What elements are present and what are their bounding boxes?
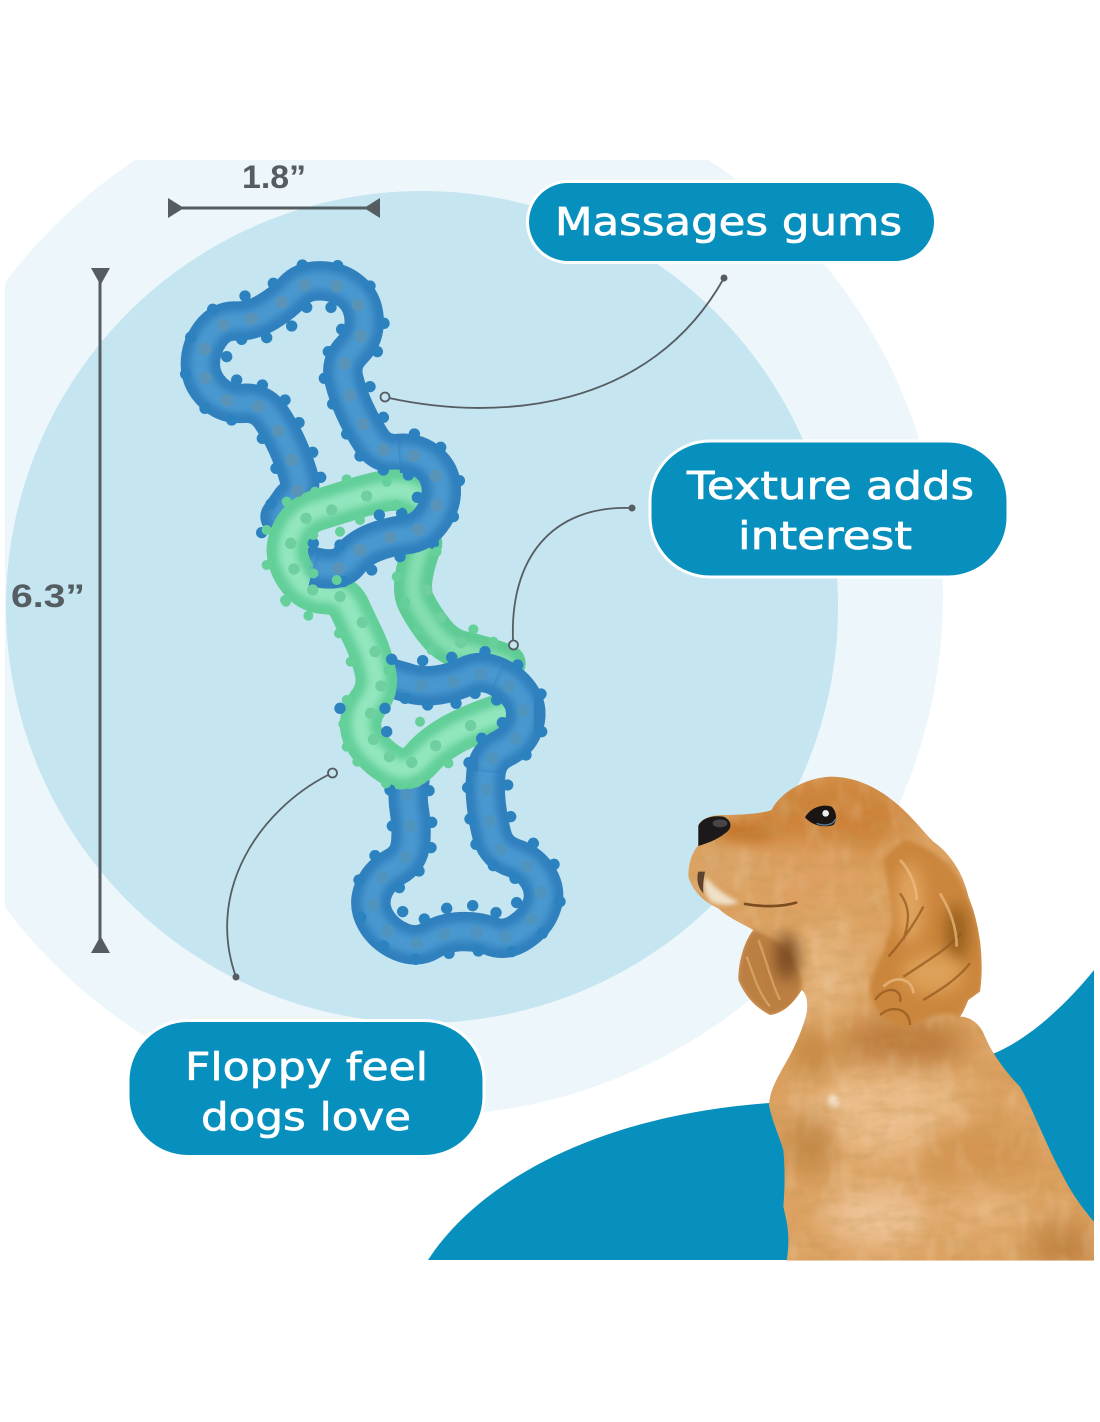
width dimension 1.8 inch: 1.8” xyxy=(242,159,306,195)
bottom bone bumps xyxy=(340,652,560,959)
callout: floppy feel dogs love: dogs love xyxy=(201,1095,411,1139)
green link bumps xyxy=(267,479,493,783)
callout line: floppy feel xyxy=(227,768,337,980)
left ear xyxy=(738,930,802,1015)
height dimension 6.3 inch xyxy=(11,268,110,953)
callout: massages gums xyxy=(528,182,936,262)
green link back strand xyxy=(413,543,507,663)
background circles xyxy=(0,74,943,1116)
top bone edge bumps xyxy=(186,265,459,582)
callout line: massages gums xyxy=(380,274,728,408)
nose xyxy=(697,816,730,846)
eye xyxy=(805,806,836,826)
callout: texture adds interest: Texture adds xyxy=(686,464,974,508)
green link front strand xyxy=(287,490,503,769)
wave: blue corner shape xyxy=(428,970,1094,1260)
right ear xyxy=(870,840,982,1027)
callout: floppy feel dogs love: Floppy feel xyxy=(185,1045,428,1089)
bottom blue bone xyxy=(371,673,544,945)
callout: massages gums: Massages gums xyxy=(555,200,902,244)
callout: texture adds interest xyxy=(650,441,1008,577)
height dimension 6.3 inch: 6.3” xyxy=(11,578,85,614)
width dimension 1.8 inch xyxy=(168,159,380,218)
product: dog toy chain xyxy=(186,265,560,959)
top bone centre bumps xyxy=(205,285,437,568)
blue overlaps on top of green xyxy=(313,453,526,772)
illustration: golden puppy looking up xyxy=(688,776,1094,1261)
fur texture xyxy=(670,760,1100,1263)
callout: texture adds interest: interest xyxy=(738,514,912,558)
callout line: texture adds interest xyxy=(509,504,636,650)
top blue bone xyxy=(200,281,441,569)
muzzle underside xyxy=(697,872,796,906)
callout: floppy feel dogs love xyxy=(128,1020,484,1156)
fur shading xyxy=(700,773,1097,1270)
